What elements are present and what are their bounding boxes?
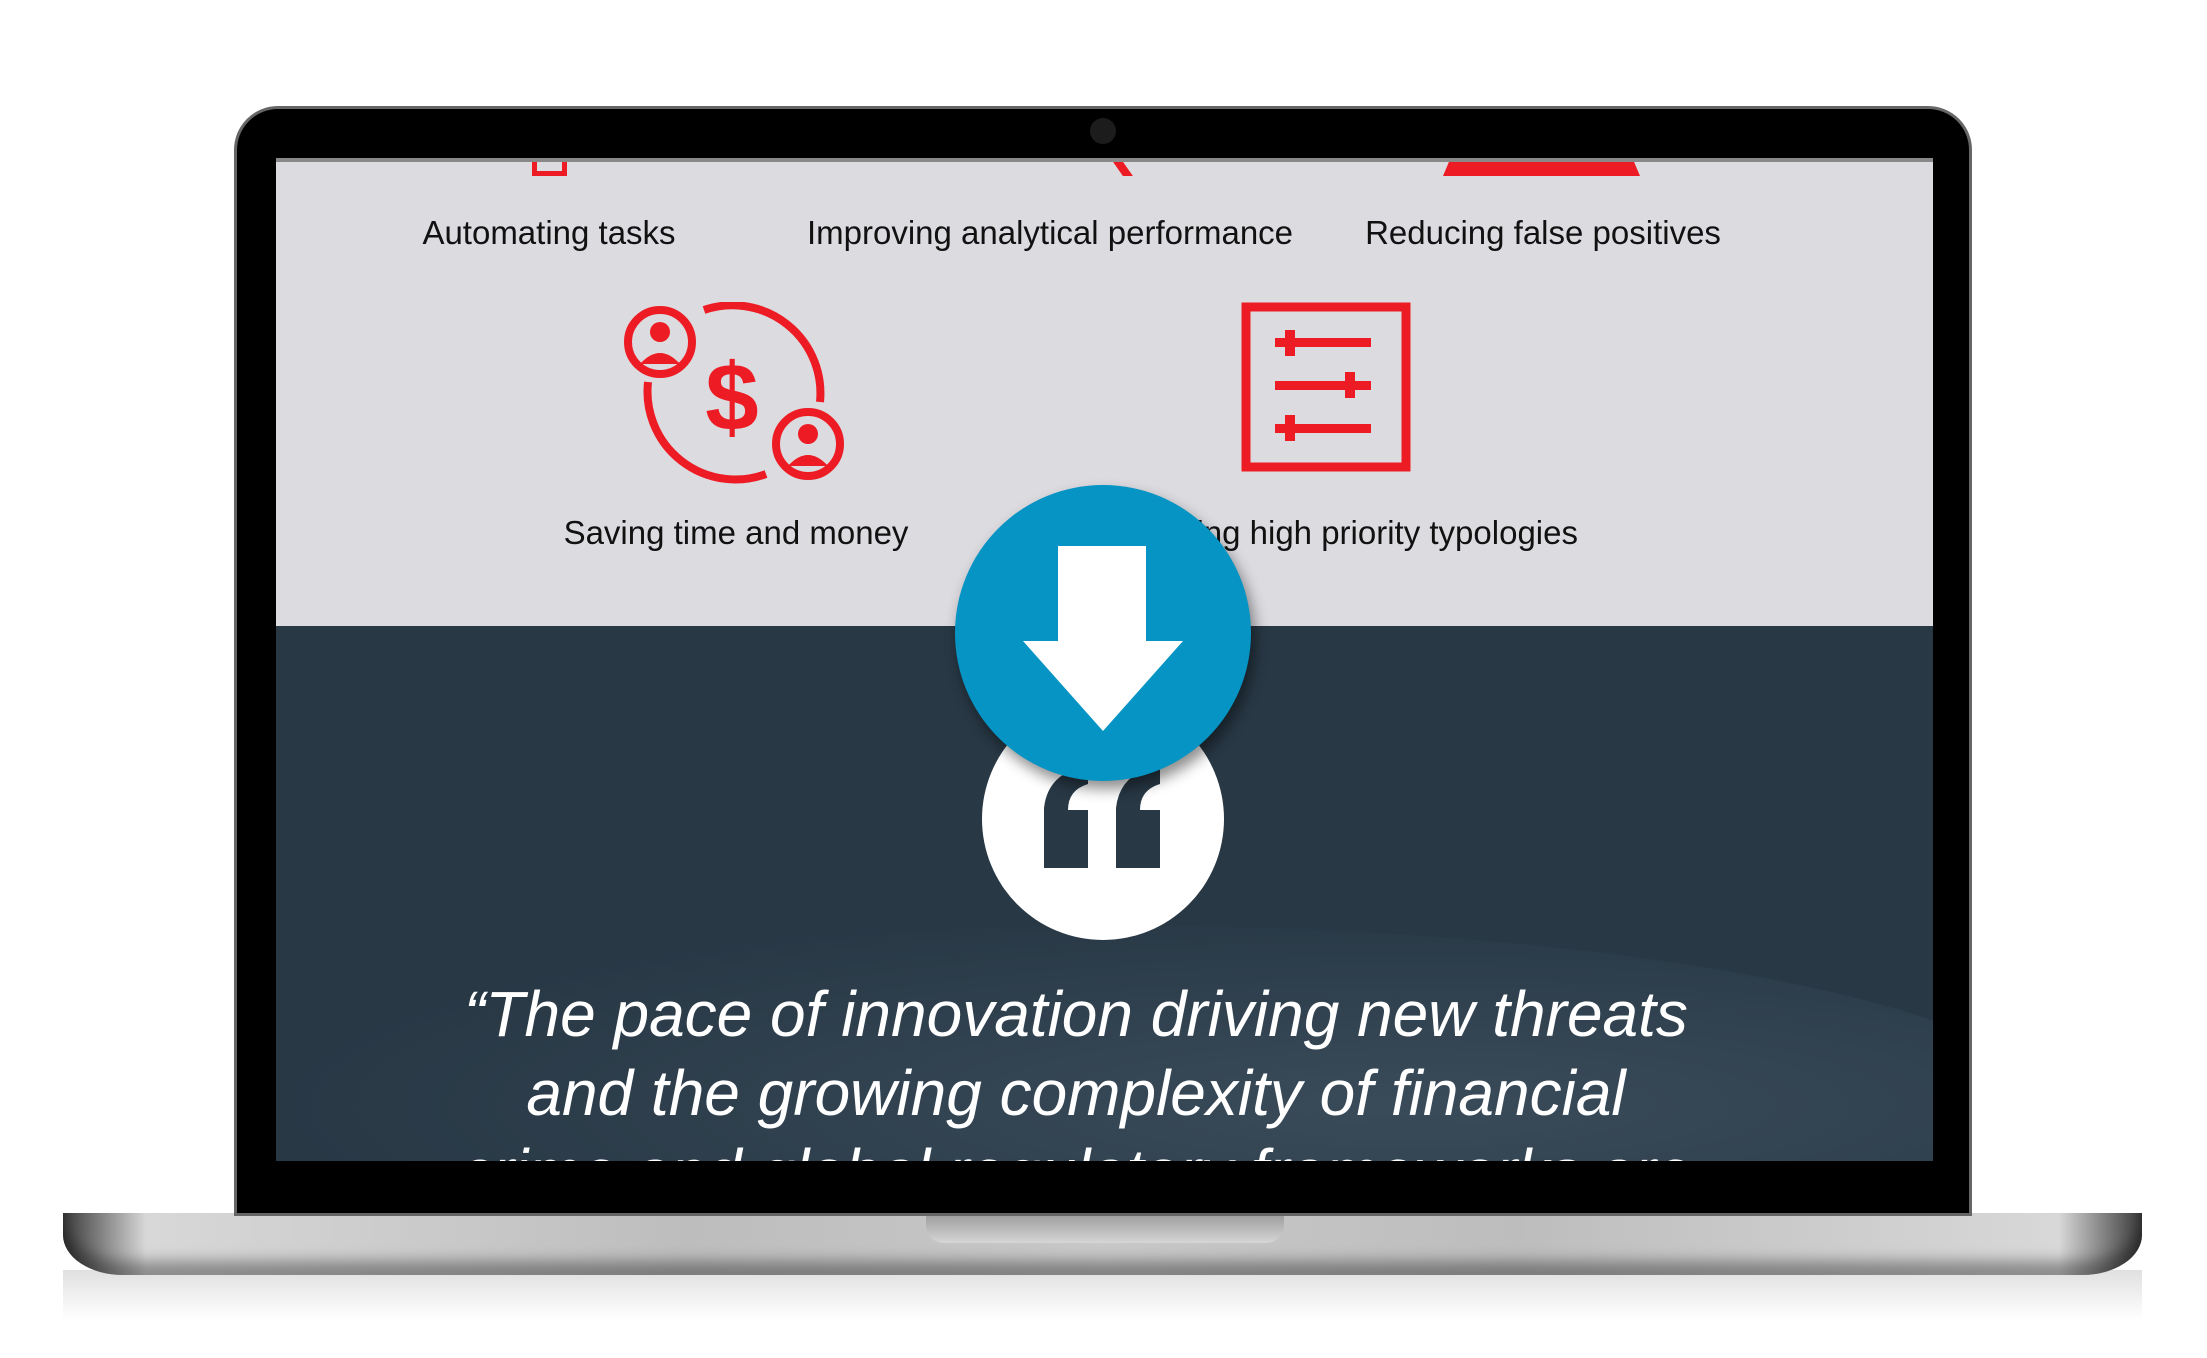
icon: improving (clipped) xyxy=(1113,162,1133,176)
icon: automating (clipped) xyxy=(532,162,567,176)
laptop base xyxy=(63,1213,2142,1275)
icon: money: $ xyxy=(705,344,759,451)
icon: reducing (clipped) xyxy=(1443,162,1640,176)
panel: benefits xyxy=(276,158,1933,551)
label: automating: Automating tasks xyxy=(422,214,676,251)
quote text: and the growing complexity of financial xyxy=(526,1057,1626,1129)
label: reducing: Reducing false positives xyxy=(1365,214,1721,251)
label: improving: Improving analytical performance xyxy=(807,214,1293,251)
network pattern xyxy=(176,926,2076,1326)
icon: download button xyxy=(955,485,1251,781)
laptop base notch xyxy=(926,1213,1284,1243)
camera xyxy=(1090,118,1116,144)
laptop base shadow xyxy=(63,1270,2142,1320)
laptop bezel xyxy=(234,106,1972,1216)
panel: quote xyxy=(276,626,1933,1161)
label: prioritizing: Prioritizing high priority typologies xyxy=(1086,514,1578,551)
icon: quote circle xyxy=(982,698,1224,940)
icon: sliders xyxy=(1242,302,1410,472)
quote text: “The pace of innovation driving new threats xyxy=(464,978,1688,1050)
label: saving: Saving time and money xyxy=(564,514,908,551)
icon: money xyxy=(624,302,844,484)
quote text xyxy=(461,978,1691,1161)
screen xyxy=(276,158,1933,1161)
